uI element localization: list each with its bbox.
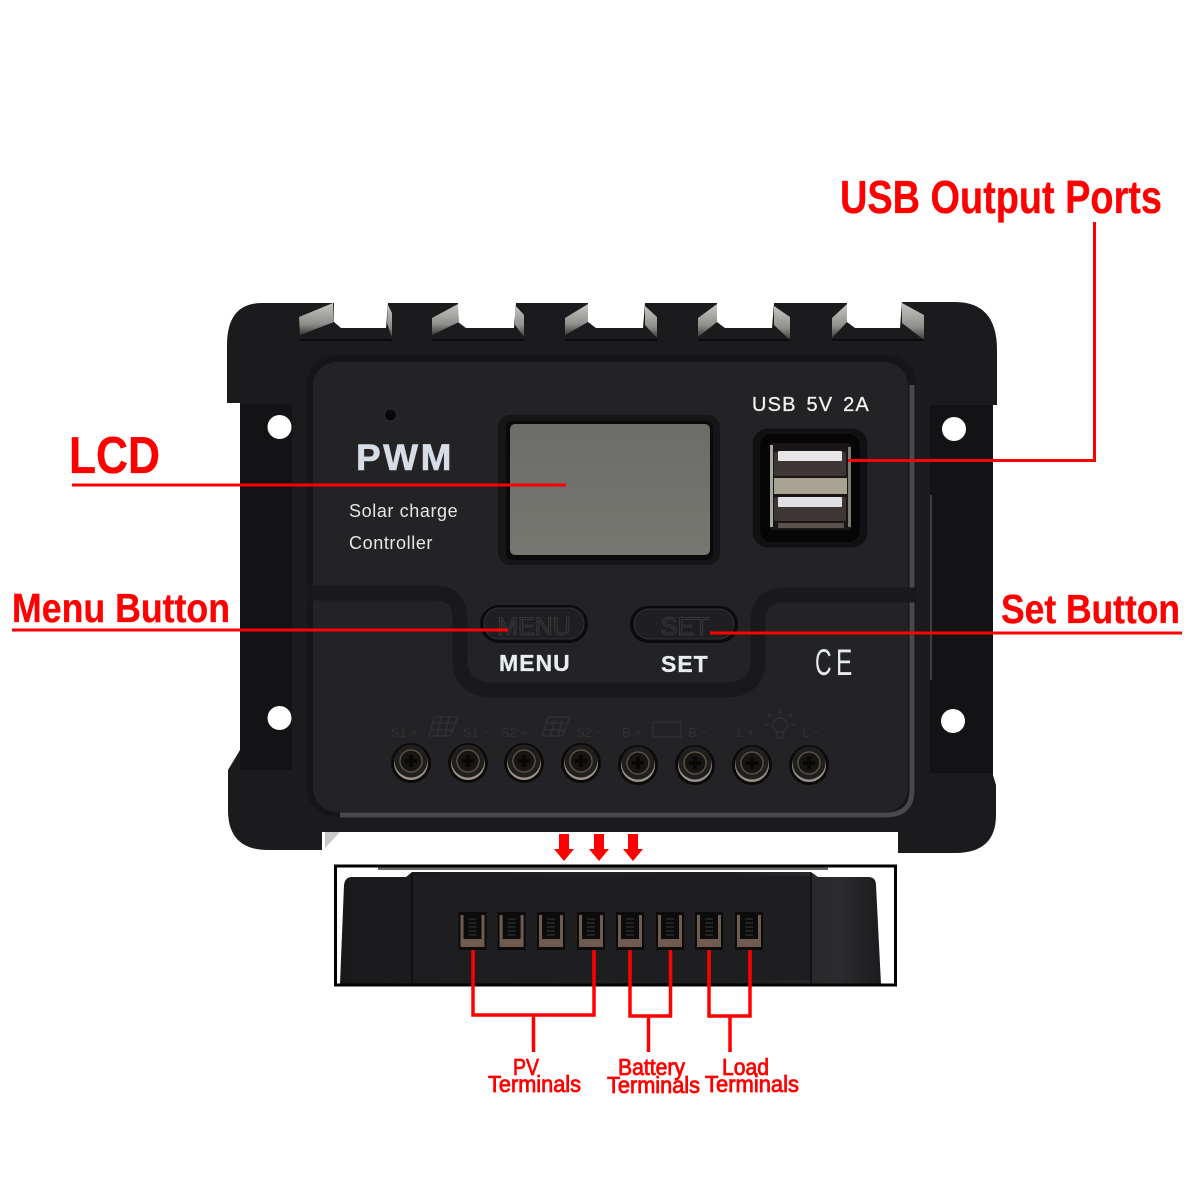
terminal markings [391,710,820,740]
inset: terminal side view [336,866,896,985]
SET caption: SET [661,651,709,677]
terminal screws [391,743,829,785]
product description: Solar charge [349,501,458,521]
left mounting strip [240,404,292,770]
label: LCD: LCD [69,427,160,485]
CE mark: E [836,642,852,683]
product description [349,501,458,553]
product description: Controller [349,533,433,553]
MENU caption: MENU [499,650,571,676]
USB rating text: USB 5V 2A [752,394,870,416]
terminal markings: L − [802,725,820,740]
terminal markings: S2 + [501,725,528,740]
CE mark [815,641,852,683]
indicator hole [384,409,396,421]
SET button [630,606,738,643]
terminal markings: L + [737,725,755,740]
right mounting strip [930,405,993,773]
terminal markings: B + [622,725,642,740]
silver notch bevels [299,303,924,848]
label: Load Terminals: Terminals [705,1071,799,1097]
panel groove [307,593,916,690]
label: Load Terminals: Load [722,1054,769,1080]
label: Menu Button: Menu Button [12,585,230,631]
label: USB Output Ports [840,171,1162,460]
label: Load Terminals [705,950,799,1097]
label: Battery Terminals: Battery [618,1054,685,1080]
mounting holes [268,415,966,733]
label: PV Terminals: Terminals [488,1071,581,1097]
terminal markings: S1 − [463,725,490,740]
MENU button [480,605,588,643]
MENU button: MENU [497,613,571,641]
USB ports [752,428,868,548]
front panel [307,355,916,817]
terminal markings: S1 + [391,725,418,740]
label: Battery Terminals [607,950,700,1098]
terminal slots [458,912,763,950]
CE mark: C [815,641,832,683]
label: Battery Terminals: Terminals [607,1072,700,1098]
arrows pointing to side view [554,834,643,861]
controller body [227,302,997,853]
label: PV Terminals: PV [513,1054,540,1080]
terminal markings: B − [688,725,708,740]
LCD screen [498,415,720,565]
label: PV Terminals [473,950,594,1097]
terminal markings: S2 − [576,725,603,740]
SET button: SET [661,613,709,641]
brand text PWM: PWM [356,437,454,478]
